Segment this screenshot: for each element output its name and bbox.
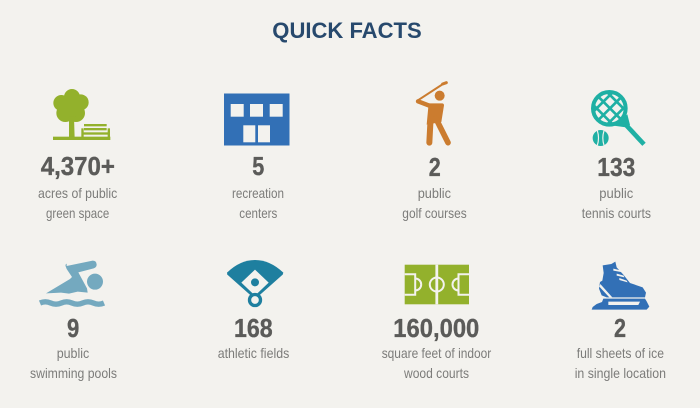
icon: tree and bench	[53, 89, 110, 140]
caption	[575, 345, 666, 381]
panel: green space	[38, 89, 117, 221]
icon: baseball diamond	[227, 260, 283, 305]
caption: in single location	[575, 365, 666, 381]
caption: tennis courts	[582, 205, 651, 221]
caption	[402, 185, 467, 221]
caption: public	[418, 185, 451, 201]
caption: public	[57, 345, 89, 361]
panel: athletic fields	[218, 260, 289, 361]
caption: green space	[46, 205, 109, 221]
caption	[30, 345, 117, 381]
icon: swimmer	[40, 261, 104, 304]
caption: centers	[239, 205, 277, 221]
number: 133	[597, 154, 635, 182]
caption: swimming pools	[30, 365, 117, 381]
caption: golf courses	[402, 205, 467, 221]
caption: acres of public	[38, 185, 117, 201]
number: 9	[67, 315, 79, 343]
panel: golf courses	[402, 83, 467, 221]
number: 160,000	[393, 315, 479, 343]
panel: swimming pools	[30, 261, 117, 381]
number: 2	[429, 154, 441, 182]
caption: full sheets of ice	[577, 345, 664, 361]
caption: square feet of indoor	[382, 345, 492, 361]
caption: wood courts	[403, 365, 469, 381]
panel: recreation centers	[224, 94, 290, 221]
caption	[232, 185, 284, 221]
caption: athletic fields	[218, 345, 289, 361]
number: 4,370+	[41, 153, 115, 181]
icon: building	[224, 94, 290, 146]
caption: public	[599, 185, 633, 201]
number: 5	[252, 153, 264, 181]
caption	[38, 185, 117, 221]
icon: golfer	[417, 83, 448, 143]
panel: tennis courts	[582, 90, 650, 218]
number: 168	[234, 315, 273, 343]
caption: recreation	[232, 185, 284, 201]
panel: sheets of ice	[575, 262, 666, 381]
icon: court	[405, 265, 469, 304]
title: QUICK FACTS	[272, 18, 422, 43]
number: 2	[614, 315, 626, 343]
icon: ice skate	[592, 262, 649, 310]
icon: tennis racket and ball	[591, 90, 646, 146]
caption	[582, 185, 651, 221]
panel: indoor wood courts	[382, 265, 492, 381]
caption	[382, 345, 492, 381]
